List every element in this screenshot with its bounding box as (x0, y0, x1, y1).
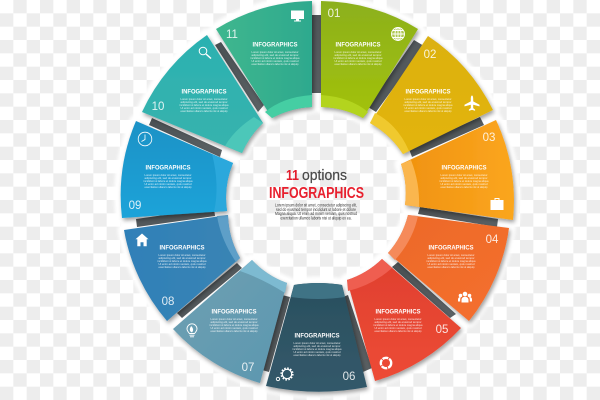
text block (250, 41, 300, 66)
text block: INFOGRAPHICS (406, 88, 451, 95)
panel: segment 11 (216, 1, 312, 118)
text block (180, 88, 229, 113)
text block: exercitation ullamco laboris nisi ut aliquip (374, 329, 422, 333)
icon: briefcase (490, 198, 504, 210)
panel: segment 01 (321, 1, 418, 118)
number 09: 09 (129, 200, 141, 212)
text block: Lorem ipsum dolor sit amet, consectetur (180, 97, 228, 101)
panel: segment 02 (370, 36, 493, 154)
text block: Ut enim ad minim veniam, quis nostrud (158, 262, 206, 266)
text block: Ut enim ad minim veniam, quis nostrud (294, 350, 341, 354)
text block (426, 244, 476, 269)
text block: Lorem ipsum dolor sit amet, consectetur (210, 317, 258, 321)
number 01: 01 (328, 8, 340, 20)
number 11: 11 (226, 29, 238, 41)
title: INFOGRAPHICS: INFOGRAPHICS (269, 185, 364, 202)
panel: segment 07 (173, 260, 287, 383)
center description: sed do eiusmod tempor incididunt ut labore et dolore (276, 207, 357, 212)
text block: Lorem ipsum dolor sit amet, consectetur (334, 50, 382, 54)
number 08: 08 (162, 296, 174, 308)
text block: Ut enim ad minim veniam, quis nostrud (334, 59, 382, 63)
text block: Ut enim ad minim veniam, quis nostrud (252, 59, 299, 63)
text block: incididunt ut labore et dolore magna aliqua (404, 103, 453, 107)
text block: Ut enim ad minim veniam, quis nostrud (210, 326, 258, 330)
text block: incididunt ut labore et dolore magna aliqua (180, 103, 229, 107)
center description (275, 202, 358, 220)
text block: adipiscing elit, sed do eiusmod tempor (294, 344, 341, 348)
text block: INFOGRAPHICS (442, 164, 487, 171)
text block (404, 88, 453, 113)
text block: adipiscing elit, sed do eiusmod tempor (428, 256, 475, 260)
icon: plane (464, 96, 480, 111)
title: 11: 11 (286, 167, 299, 184)
text block: INFOGRAPHICS (212, 308, 257, 315)
number 10: 10 (152, 101, 164, 113)
text block (144, 164, 193, 189)
text block: Ut enim ad minim veniam, quis nostrud (404, 106, 452, 110)
number 06: 06 (343, 371, 355, 383)
panel: segment 10 (142, 35, 263, 153)
text block: INFOGRAPHICS (252, 41, 298, 48)
text block: Lorem ipsum dolor sit amet, consectetur (428, 253, 475, 257)
panel: segment 09 (121, 121, 233, 218)
text block: Lorem ipsum dolor sit amet, consectetur (252, 50, 299, 54)
text block (374, 308, 423, 333)
number 04: 04 (486, 234, 499, 246)
text block (210, 308, 259, 333)
text block: exercitation ullamco laboris nisi ut aliquip (144, 185, 192, 189)
icon: house (136, 234, 148, 246)
text block: INFOGRAPHICS (294, 332, 340, 339)
panel: segment 05 (347, 259, 461, 381)
text block (334, 41, 383, 66)
number 07: 07 (242, 362, 254, 374)
text block: Lorem ipsum dolor sit amet, consectetur (294, 341, 341, 345)
text block (158, 244, 207, 269)
connector bars between segments (136, 15, 498, 372)
text block: exercitation ullamco laboris nisi ut aliquip (294, 353, 341, 357)
text block: exercitation ullamco laboris nisi ut aliquip (334, 62, 382, 66)
text block: exercitation ullamco laboris nisi ut aliquip (180, 109, 228, 113)
text block: incididunt ut labore et dolore magna aliqua (440, 179, 489, 183)
text block: INFOGRAPHICS (160, 244, 205, 251)
text block: adipiscing elit, sed do eiusmod tempor (210, 320, 258, 324)
icon: globe (392, 28, 404, 40)
text block: adipiscing elit, sed do eiusmod tempor (374, 320, 422, 324)
text block: Ut enim ad minim veniam, quis nostrud (374, 326, 422, 330)
text block: INFOGRAPHICS (146, 164, 191, 171)
text block: adipiscing elit, sed do eiusmod tempor (404, 100, 452, 104)
text block: Lorem ipsum dolor sit amet, consectetur (440, 173, 488, 177)
text block: incididunt ut labore et dolore magna aliqua (144, 179, 193, 183)
center title block (269, 167, 364, 220)
icon: light bulb (187, 324, 197, 337)
text block: adipiscing elit, sed do eiusmod tempor (252, 53, 299, 57)
text block: adipiscing elit, sed do eiusmod tempor (334, 53, 382, 57)
text block: Ut enim ad minim veniam, quis nostrud (440, 182, 488, 186)
text block: incididunt ut labore et dolore magna aliqua (210, 323, 259, 327)
text block: adipiscing elit, sed do eiusmod tempor (180, 100, 228, 104)
text block: Ut enim ad minim veniam, quis nostrud (180, 106, 228, 110)
text block: exercitation ullamco laboris nisi ut aliquip (252, 62, 299, 66)
icon: people (458, 292, 472, 302)
text block: incididunt ut labore et dolore magna aliqua (334, 56, 383, 60)
icon: gear (276, 368, 293, 381)
text block: INFOGRAPHICS (182, 88, 227, 95)
number 02: 02 (424, 49, 436, 61)
text block: INFOGRAPHICS (428, 244, 474, 251)
panel: segment 04 (388, 215, 509, 321)
icon: magnifier (199, 47, 211, 58)
text block: Lorem ipsum dolor sit amet, consectetur (404, 97, 452, 101)
text block (440, 164, 489, 189)
number 03: 03 (483, 132, 495, 144)
text block: exercitation ullamco laboris nisi ut aliquip (158, 265, 206, 269)
text block: exercitation ullamco laboris nisi ut aliquip (428, 265, 475, 269)
text block: incididunt ut labore et dolore magna aliqua (374, 323, 423, 327)
panel: segment 06 (266, 283, 367, 392)
text block: INFOGRAPHICS (336, 41, 381, 48)
text block: incididunt ut labore et dolore magna aliqua (292, 347, 342, 351)
center description: Magna aliqua. Ut enim ad minim veniam, quis nostrud (275, 211, 358, 216)
icon: clock (138, 132, 152, 146)
text block: Ut enim ad minim veniam, quis nostrud (428, 262, 475, 266)
text block: adipiscing elit, sed do eiusmod tempor (144, 176, 192, 180)
center description: Lorem ipsum dolor sit amet, consectetur adipiscing elit, (275, 202, 357, 208)
text block: incididunt ut labore et dolore magna aliqua (158, 259, 207, 263)
text block: exercitation ullamco laboris nisi ut aliquip (404, 109, 452, 113)
number 05: 05 (436, 324, 448, 336)
text block: adipiscing elit, sed do eiusmod tempor (440, 176, 488, 180)
center description: exercitation ullamco laboris nisi ut aliquip ex ea. (280, 216, 352, 220)
text block: Lorem ipsum dolor sit amet, consectetur (144, 173, 192, 177)
title: options: options (302, 167, 347, 184)
text block: Lorem ipsum dolor sit amet, consectetur (158, 253, 206, 257)
panel: segment 03 (401, 120, 514, 220)
text block: adipiscing elit, sed do eiusmod tempor (158, 256, 206, 260)
text block: Ut enim ad minim veniam, quis nostrud (144, 182, 192, 186)
text block: Lorem ipsum dolor sit amet, consectetur (374, 317, 422, 321)
text block: exercitation ullamco laboris nisi ut aliquip (210, 329, 258, 333)
text block: incididunt ut labore et dolore magna aliqua (426, 259, 476, 263)
text block: INFOGRAPHICS (376, 308, 421, 315)
icon: ring (381, 358, 391, 368)
text block (292, 332, 342, 357)
panel: segment 08 (124, 215, 240, 321)
text block: incididunt ut labore et dolore magna aliqua (250, 56, 300, 60)
icon: monitor (291, 10, 304, 22)
text block: exercitation ullamco laboris nisi ut aliquip (440, 185, 488, 189)
